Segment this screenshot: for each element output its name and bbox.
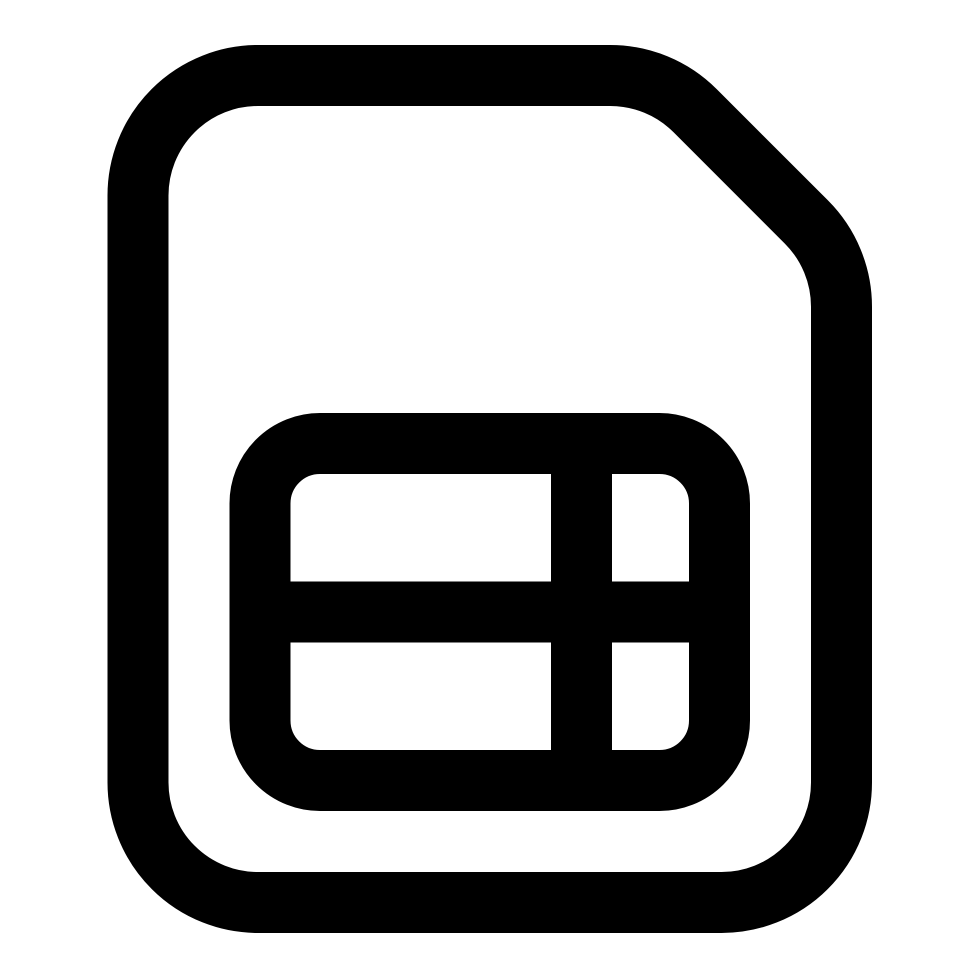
SIM card body outline [138,75,842,903]
SIM chip [260,444,720,780]
